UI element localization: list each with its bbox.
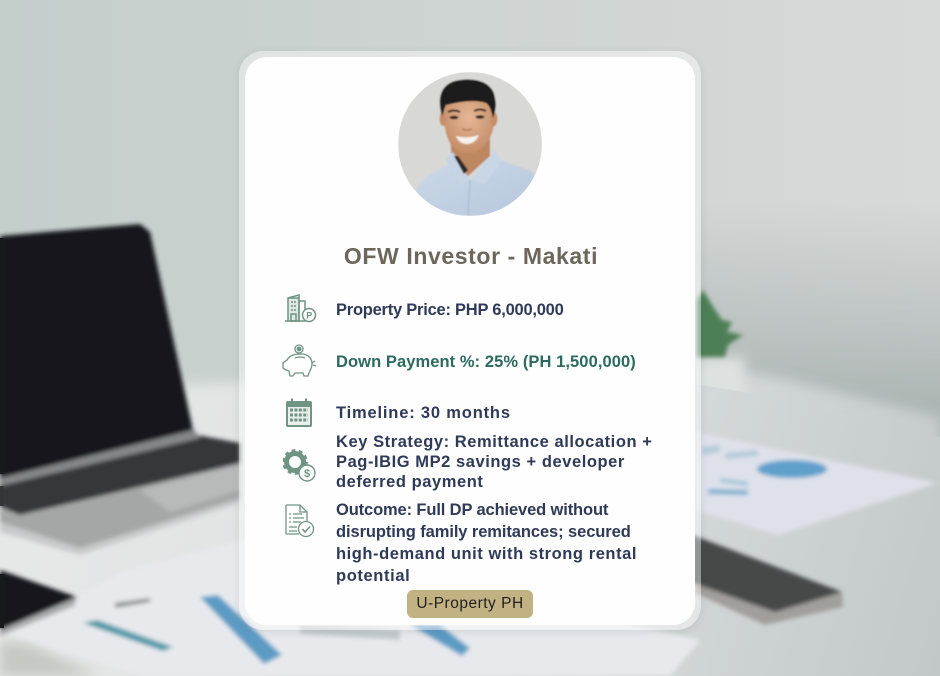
plant <box>697 290 743 357</box>
key strategy text: Pag-IBIG MP2 savings + developer <box>336 453 625 471</box>
icon: building with peso coin <box>285 294 316 322</box>
brand tag: U-Property PH <box>416 595 524 612</box>
icon: gear with dollar coin: $ <box>304 468 310 480</box>
papers bottom <box>7 540 700 676</box>
property price text: Property Price: PHP 6,000,000 <box>336 301 564 319</box>
card frame <box>239 51 701 630</box>
down payment text: Down Payment %: 25% (PH 1,500,000) <box>336 353 636 371</box>
outcome text: potential <box>336 567 410 585</box>
portrait photo <box>398 72 542 216</box>
title: OFW Investor - Makati <box>344 243 598 269</box>
key strategy text: Key Strategy: Remittance allocation + <box>336 433 652 451</box>
neck <box>450 138 490 176</box>
hinge <box>0 428 200 486</box>
icon: piggy bank <box>282 344 316 377</box>
left edge fill <box>0 238 4 628</box>
timeline text: Timeline: 30 months <box>336 404 511 422</box>
icon: building with peso coin: P <box>306 310 312 320</box>
outcome text <box>336 501 637 585</box>
outcome text: high-demand unit with strong rental <box>336 545 637 563</box>
phone right <box>695 548 843 625</box>
paper right <box>695 432 938 535</box>
keyboard <box>0 435 240 515</box>
hair <box>440 79 496 118</box>
card panel <box>245 57 695 625</box>
face <box>442 100 494 152</box>
laptop base <box>0 460 240 555</box>
icon: calendar <box>286 398 312 427</box>
shirt <box>416 161 534 216</box>
outcome text: disrupting family remitances; secured <box>336 523 631 541</box>
laptop screen <box>0 224 193 478</box>
brand tag <box>407 590 533 618</box>
key strategy text <box>336 433 652 491</box>
icon: gear with dollar coin <box>283 449 316 482</box>
key strategy text: deferred payment <box>336 473 483 491</box>
phone left <box>0 570 77 636</box>
desk lower fill <box>0 385 940 676</box>
icon: document with check <box>285 504 314 538</box>
outcome text: Outcome: Full DP achieved without <box>336 501 608 519</box>
